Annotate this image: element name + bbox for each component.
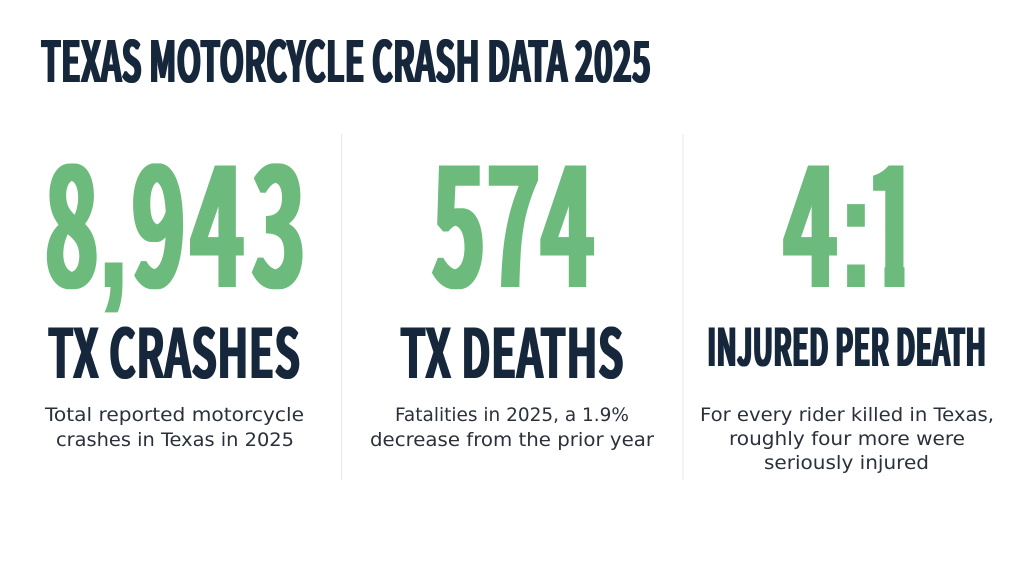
stat: 4:1 bbox=[784, 97, 922, 335]
title: TEXAS MOTORCYCLE CRASH DATA 2025 bbox=[41, 17, 651, 99]
stat: 574: 574 bbox=[432, 97, 594, 335]
description: crashes: Total reported motorcycle bbox=[44, 404, 304, 426]
stat: 8,943 bbox=[45, 97, 305, 335]
description: injured: For every rider killed in Texas, bbox=[700, 404, 994, 426]
description: injured: seriously injured bbox=[764, 452, 929, 474]
description: injured: roughly four more were bbox=[729, 428, 965, 450]
description: deaths: decrease from the prior year bbox=[370, 429, 654, 451]
stat: 4:1: 4 bbox=[784, 97, 837, 335]
description: deaths: Fatalities in 2025, a 1.9% bbox=[395, 404, 629, 426]
description: crashes: crashes in Texas in 2025 bbox=[56, 429, 294, 451]
description: injured bbox=[700, 404, 994, 474]
stat: 8,943: , bbox=[101, 140, 126, 323]
panel: deaths bbox=[370, 97, 654, 451]
stat: 4:1: 1 bbox=[866, 97, 919, 335]
stat: 8,943: 3 bbox=[252, 97, 305, 335]
heading: TX crashes: TX CRASHES bbox=[48, 300, 300, 399]
stat: 8,943: 9 bbox=[132, 97, 185, 335]
heading: injured per death: INJURED PER DEATH bbox=[707, 306, 986, 381]
stat: 8,943: 4 bbox=[191, 97, 244, 335]
panel: injured per death bbox=[700, 97, 994, 474]
heading: TX deaths: TX DEATHS bbox=[400, 300, 623, 399]
description: deaths bbox=[370, 404, 654, 451]
stat: 8,943: 8 bbox=[45, 97, 98, 335]
panel: crashes bbox=[44, 97, 305, 451]
description: crashes bbox=[44, 404, 304, 451]
stat: 4:1: : bbox=[841, 140, 871, 323]
